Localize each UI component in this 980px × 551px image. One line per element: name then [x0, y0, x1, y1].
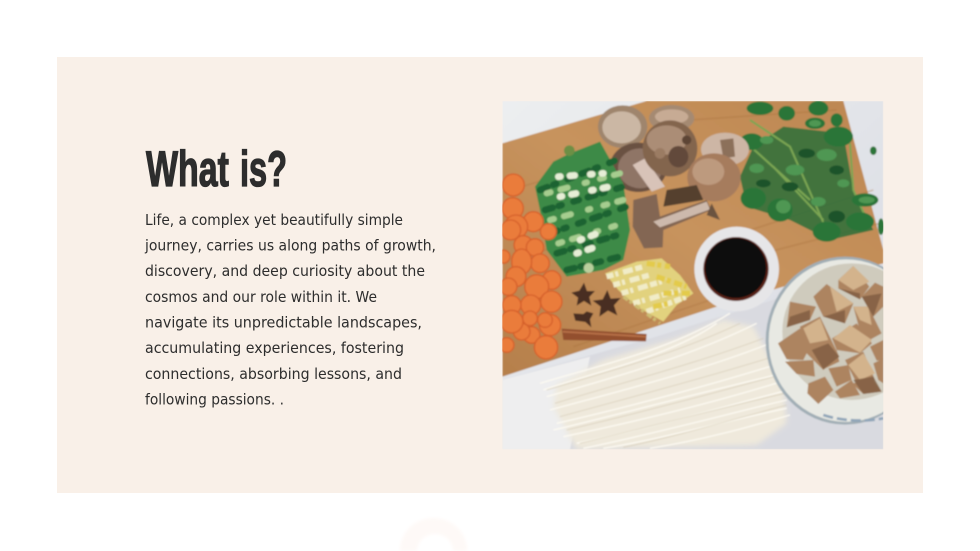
body text [144, 211, 436, 408]
carrots [497, 174, 562, 359]
body text: connections, absorbing lessons, and [145, 365, 402, 383]
panel: cream background [57, 57, 923, 493]
body text: accumulating experiences, fostering [145, 339, 404, 357]
tofu bowl [765, 256, 884, 426]
mushrooms [598, 105, 749, 248]
cutting board [502, 101, 883, 377]
body text: Life, a complex yet beautifully simple [145, 211, 403, 229]
heading: What [146, 141, 229, 197]
decorative faint arc at bottom [400, 518, 467, 551]
rice noodles [540, 313, 790, 449]
ginger [605, 258, 693, 323]
cinnamon stick [562, 329, 647, 341]
star anise [571, 283, 621, 327]
soy sauce dish [694, 227, 779, 311]
table surface [502, 101, 884, 380]
body text: cosmos and our role within it. We [145, 288, 377, 306]
body text: navigate its unpredictable landscapes, [145, 314, 422, 332]
body text: following passions. . [145, 390, 284, 408]
photo: ingredients on a cutting board [502, 101, 884, 450]
body text: journey, carries us along paths of growth, [144, 236, 436, 254]
heading: is? [240, 141, 287, 197]
body text: discovery, and deep curiosity about the [145, 262, 425, 280]
cilantro [740, 101, 884, 242]
green onions [535, 142, 630, 277]
